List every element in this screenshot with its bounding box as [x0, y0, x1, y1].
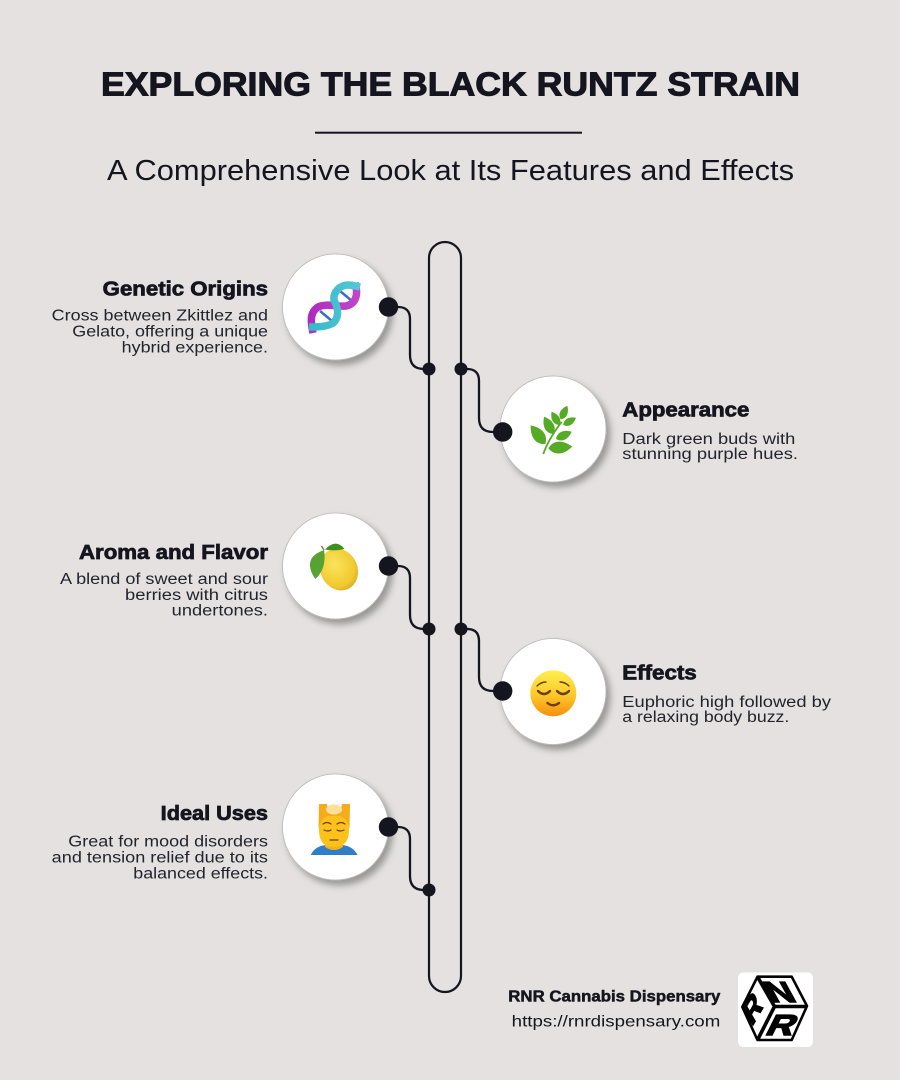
text: aroma description: berries with citrus	[125, 587, 268, 604]
text: appearance description: stunning purple hues.	[622, 446, 798, 463]
connector dot large	[379, 556, 398, 576]
logo: R	[761, 1009, 804, 1042]
icon circle: dna	[282, 254, 388, 360]
text: effects description: a relaxing body buzz.	[622, 709, 789, 726]
heading: ideal uses: Ideal Uses	[161, 803, 268, 825]
logo: R	[739, 985, 767, 1033]
connector dot small	[454, 362, 468, 376]
connector: aroma	[388, 566, 429, 629]
icon: head massage	[311, 804, 358, 855]
text: appearance description	[622, 431, 798, 463]
heading: appearance: Appearance	[622, 400, 749, 422]
panel: genetic origins	[52, 254, 435, 376]
panel: ideal uses	[52, 774, 435, 896]
connector dot small	[454, 622, 468, 636]
icon: relieved face	[530, 670, 576, 716]
text: genetic origins description: Gelato, offering a unique	[72, 324, 268, 341]
footer brand text	[508, 989, 720, 1031]
text: aroma description	[60, 571, 268, 620]
text: aroma description: undertones.	[172, 603, 268, 620]
text: genetic origins description	[52, 308, 268, 357]
panel: aroma and flavor	[60, 513, 436, 636]
text: genetic origins description: hybrid experience.	[122, 340, 268, 357]
connector: genetic origins	[388, 307, 429, 369]
connector dot large	[379, 817, 398, 837]
text: ideal uses description: balanced effects.	[133, 865, 268, 882]
connector dot small	[422, 622, 436, 636]
connector: appearance	[461, 369, 503, 432]
connector: effects	[461, 629, 503, 691]
heading: effects: Effects	[622, 663, 697, 685]
text: aroma description: A blend of sweet and sour	[60, 571, 268, 588]
icon circle: head massage	[282, 774, 388, 880]
icon: dna	[309, 283, 360, 333]
connector dot small	[422, 362, 436, 376]
connector dot large	[493, 422, 512, 442]
text: ideal uses description: and tension relief due to its	[52, 850, 268, 867]
subtitle: A Comprehensive Look at Its Features and Effects	[107, 155, 794, 187]
title: EXPLORING THE BLACK RUNTZ STRAIN	[101, 67, 800, 104]
icon circle: relieved face	[500, 638, 606, 744]
connector: ideal uses	[388, 827, 429, 890]
footer brand text: RNR Cannabis Dispensary	[508, 989, 720, 1006]
text: ideal uses description: Great for mood disorders	[68, 834, 268, 851]
central timeline tube	[429, 242, 461, 992]
icon: lemon	[310, 542, 365, 597]
icon: herb leaves	[526, 404, 578, 454]
text: appearance description: Dark green buds with	[622, 431, 795, 448]
icon circle: herb	[500, 376, 606, 482]
icon circle: lemon	[282, 513, 388, 619]
text: genetic origins description: Cross between Zkittlez and	[52, 308, 268, 325]
panel: appearance	[454, 362, 798, 482]
logo: N	[758, 977, 802, 1009]
connector dot large	[379, 297, 398, 317]
footer brand text: https://rnrdispensary.com	[512, 1014, 720, 1031]
panel: effects	[454, 622, 831, 744]
connector dot small	[422, 884, 436, 896]
logo	[738, 972, 813, 1047]
heading: genetic origins: Genetic Origins	[103, 279, 268, 301]
text: effects description	[622, 694, 831, 726]
heading: aroma and flavor: Aroma and Flavor	[79, 542, 268, 564]
title divider	[315, 132, 582, 134]
text: ideal uses description	[52, 834, 268, 882]
text: effects description: Euphoric high followed by	[622, 694, 831, 711]
connector dot large	[493, 681, 512, 701]
